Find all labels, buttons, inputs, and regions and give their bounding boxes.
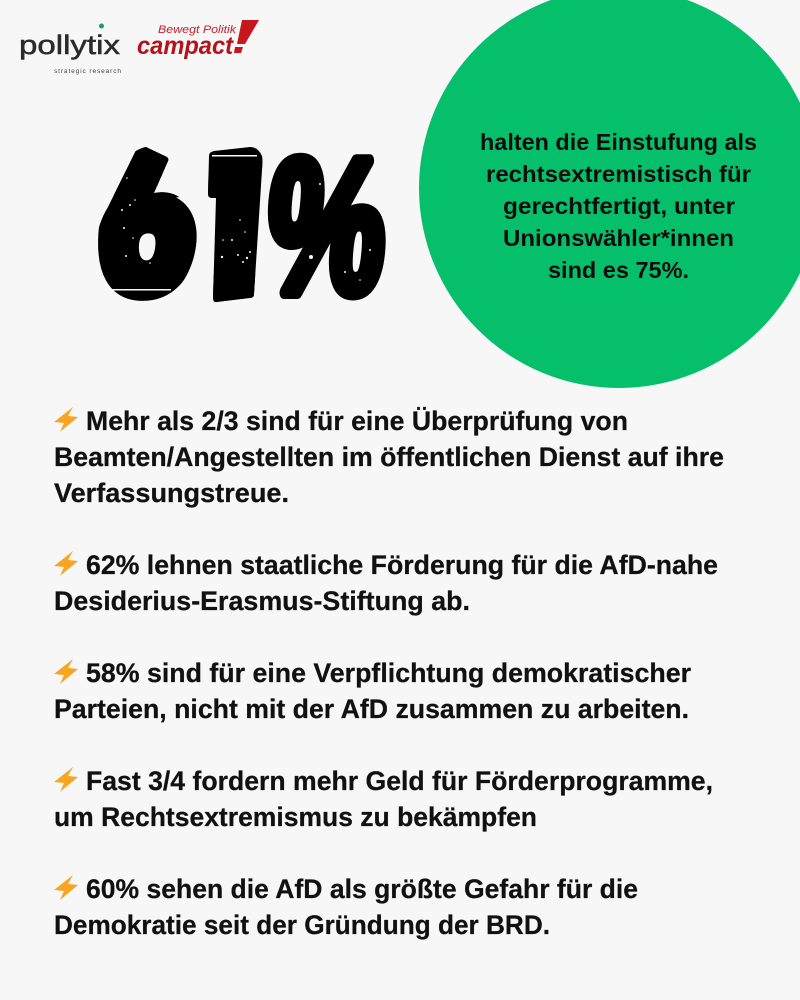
big number 61%: 6 — [91, 116, 207, 330]
circle text — [480, 129, 757, 283]
circle text: Unionswähler*innen — [503, 225, 734, 251]
bullet 4: um Rechtsextremismus zu bekämpfen — [54, 802, 537, 832]
bullet 3: Parteien, nicht mit der AfD zusammen zu arbeiten. — [54, 694, 689, 724]
bullet 5: 60% sehen die AfD als größte Gefahr für die — [86, 874, 638, 904]
circle text: rechtsextremistisch für — [486, 161, 751, 187]
icon: lightning bolt — [54, 659, 78, 684]
logo: campact: campact — [137, 32, 235, 60]
bullet 2 — [54, 550, 718, 616]
logo: pollytix — [19, 24, 121, 75]
bullet 2: 62% lehnen staatliche Förderung für die AfD-nahe — [86, 550, 718, 580]
green circle — [419, 0, 800, 388]
logo: pollytix: strategic research — [54, 68, 121, 75]
bullet 3 — [54, 658, 691, 724]
bullet 2: Desiderius-Erasmus-Stiftung ab. — [54, 586, 470, 616]
speckles — [111, 155, 371, 290]
bullet 5: Demokratie seit der Gründung der BRD. — [54, 910, 550, 940]
bullet 1: Mehr als 2/3 sind für eine Überprüfung von — [86, 406, 628, 436]
logo: campact — [137, 20, 259, 60]
bullet 5 — [54, 874, 638, 940]
big number 61% — [98, 146, 386, 302]
big number 61%: 1 — [182, 111, 296, 339]
circle text: sind es 75%. — [548, 257, 689, 283]
bullet 4: Fast 3/4 fordern mehr Geld für Förderprogramme, — [86, 766, 713, 796]
logo: pollytix: pollytix — [19, 30, 121, 60]
bullet 1: Beamten/Angestellten im öffentlichen Dienst auf ihre — [54, 442, 724, 472]
icon: lightning bolt — [54, 767, 78, 792]
bullet 1 — [54, 406, 724, 508]
circle text: halten die Einstufung als — [480, 129, 757, 155]
big number 61%: % — [258, 120, 395, 332]
icon: lightning bolt — [54, 551, 78, 576]
icon: lightning bolt — [54, 875, 78, 900]
circle text: gerechtfertigt, unter — [503, 193, 735, 219]
icon: lightning bolt — [54, 407, 78, 432]
bullet 3: 58% sind für eine Verpflichtung demokratischer — [86, 658, 691, 688]
logo: campact: Bewegt Politik — [158, 24, 237, 36]
bullet 1: Verfassungstreue. — [54, 478, 289, 508]
bullet 4 — [54, 766, 713, 832]
